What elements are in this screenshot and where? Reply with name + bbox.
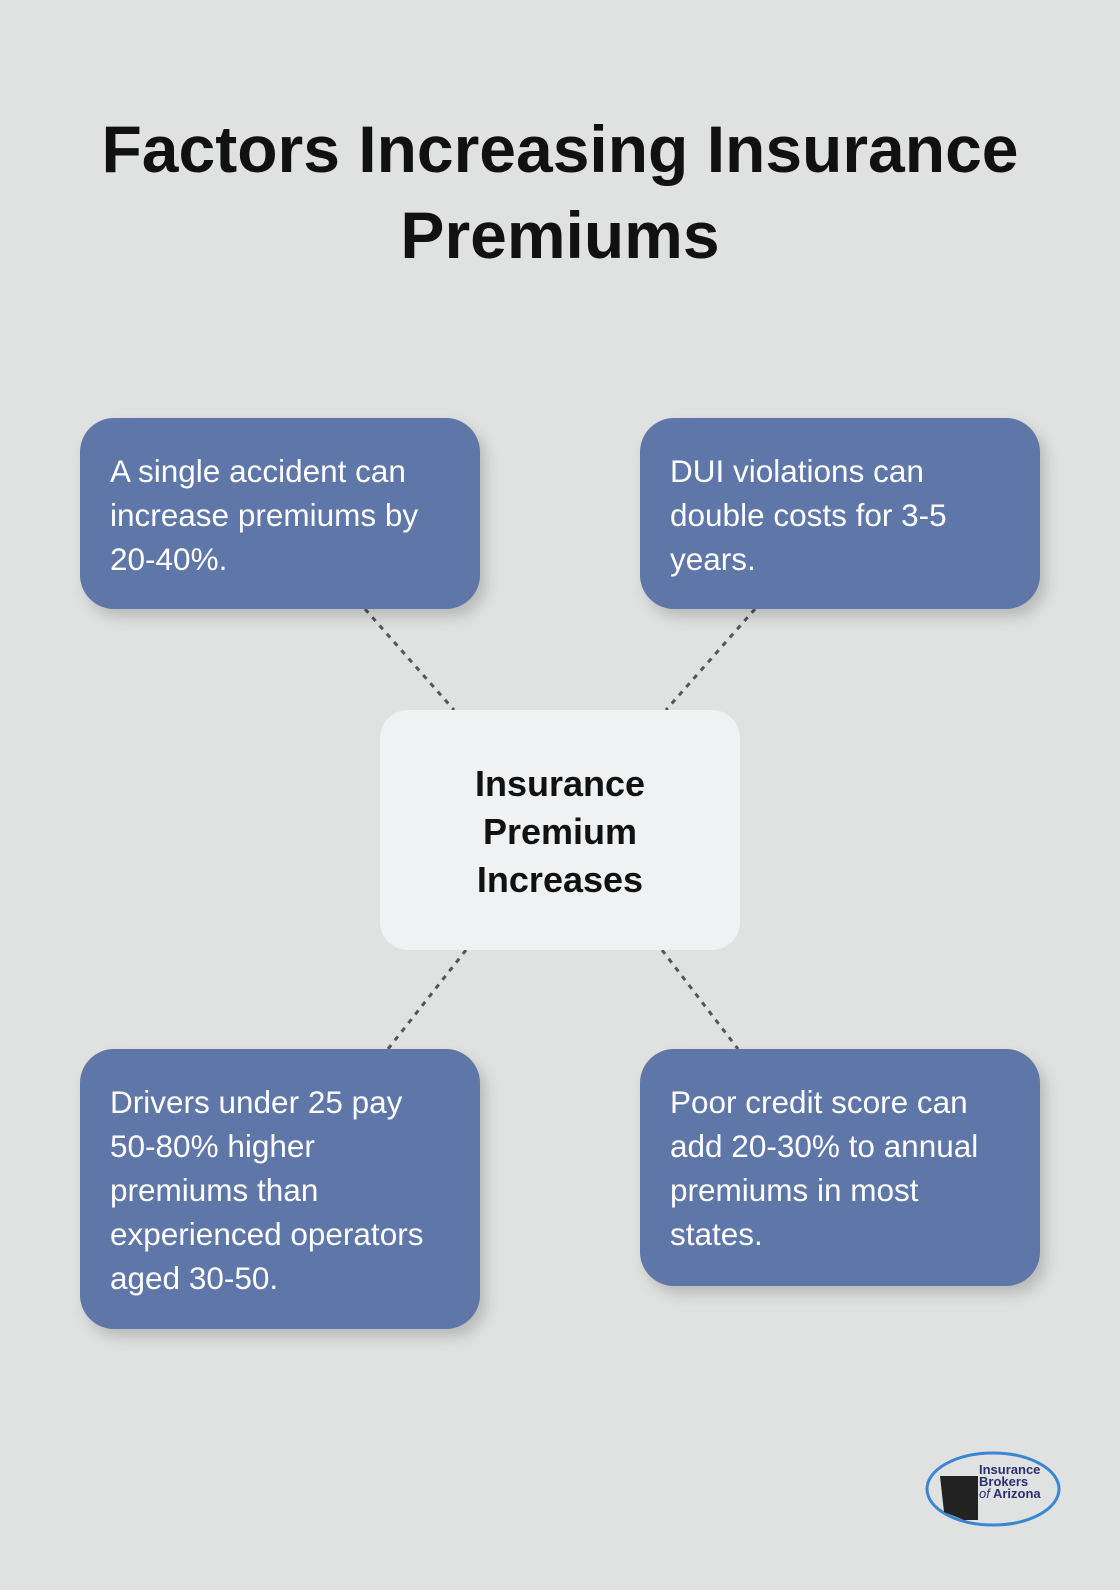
center node: Increases	[477, 859, 643, 900]
panel: credit score: premiums in most	[670, 1172, 919, 1208]
panel: young drivers: 50-80% higher	[110, 1128, 315, 1164]
logo: Insurance	[979, 1462, 1040, 1477]
panel: credit score	[640, 1049, 1040, 1286]
logo	[926, 1452, 1060, 1526]
panel: young drivers: premiums than	[110, 1172, 318, 1208]
panel: DUI: DUI violations can	[670, 453, 924, 489]
logo: of Arizona	[979, 1486, 1041, 1501]
logo: Brokers	[979, 1474, 1028, 1489]
panel: young drivers	[80, 1049, 480, 1329]
center node: Insurance	[475, 763, 645, 804]
title: Factors Increasing Insurance	[101, 112, 1018, 186]
panel: DUI	[640, 418, 1040, 609]
panel: accident: A single accident can	[110, 453, 406, 489]
panel: young drivers: Drivers under 25 pay	[110, 1084, 402, 1120]
panel: young drivers: experienced operators	[110, 1216, 423, 1252]
panel: accident: increase premiums by	[110, 497, 418, 533]
center node	[380, 710, 740, 950]
panel: credit score: Poor credit score can	[670, 1084, 968, 1120]
title: Premiums	[400, 198, 720, 272]
panel: credit score: add 20-30% to annual	[670, 1128, 978, 1164]
panel: accident: 20-40%.	[110, 541, 227, 577]
center node: Premium	[483, 811, 637, 852]
panel: young drivers: aged 30-50.	[110, 1260, 278, 1296]
panel: accident	[80, 418, 480, 609]
panel: credit score: states.	[670, 1216, 763, 1252]
panel: DUI: years.	[670, 541, 756, 577]
panel: DUI: double costs for 3-5	[670, 497, 947, 533]
title	[101, 112, 1018, 272]
